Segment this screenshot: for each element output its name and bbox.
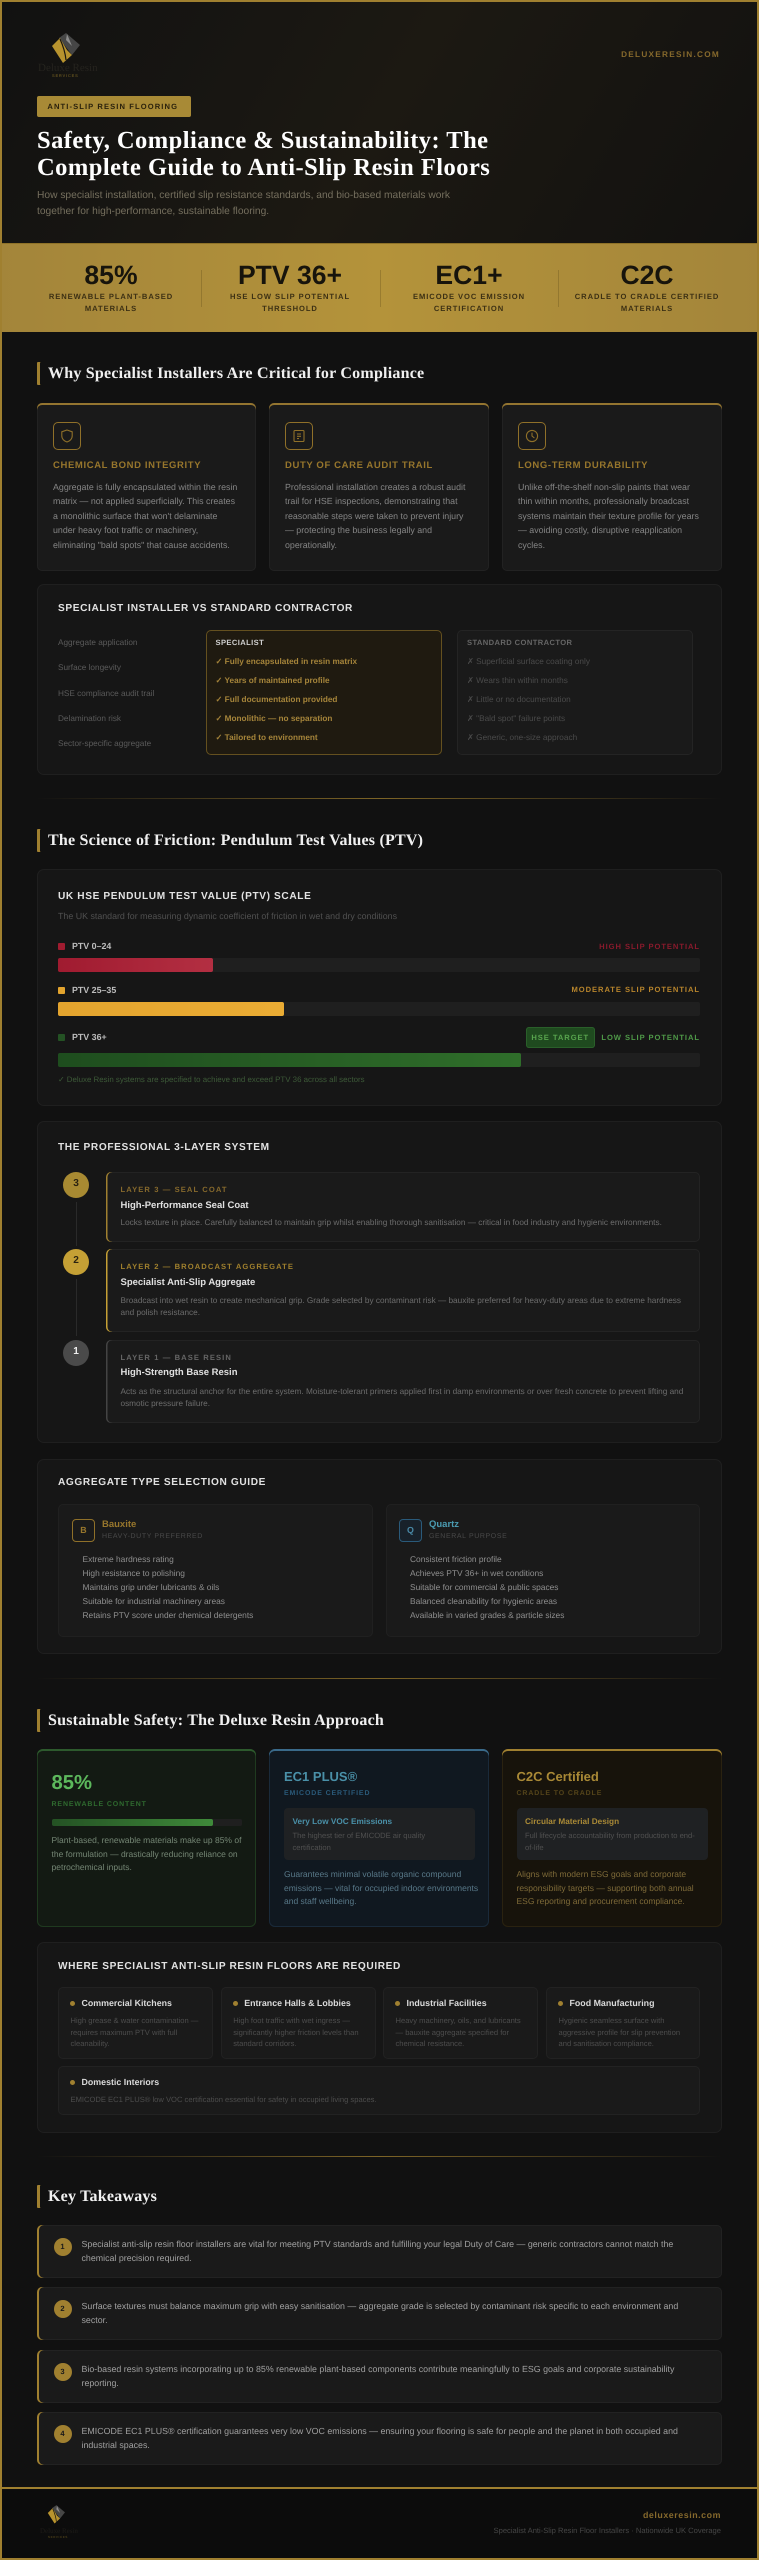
card: C2C certified: C2C Certified — [516, 1769, 599, 1784]
step marker 3 — [63, 1172, 89, 1198]
footer logo — [40, 2505, 78, 2539]
comparison row labels: HSE compliance audit trail — [58, 688, 154, 698]
sector: domestic interiors — [58, 2066, 700, 2115]
heading: key takeaways — [37, 2185, 722, 2208]
footer tagline: Specialist Anti-Slip Resin Floor Installers · Nationwide UK Coverage — [494, 2526, 721, 2535]
sector: food manufacturing — [546, 1987, 700, 2059]
badge text: ANTI-SLIP RESIN FLOORING — [47, 102, 178, 110]
subtitle: together for high-performance, sustainable flooring. — [37, 206, 269, 217]
stat: 85% — [49, 260, 173, 313]
card: EC1 plus: EMICODE CERTIFIED — [284, 1790, 370, 1797]
card: EC1 plus: emissions — vital for occupied indoor environments — [284, 1883, 478, 1893]
card: duty of care audit trail: — protecting the business legally and — [285, 525, 432, 535]
callout: very low VOC: Very Low VOC Emissions — [292, 1817, 392, 1826]
step marker 3: 3 — [73, 1178, 79, 1189]
card: duty of care audit trail: operationally. — [285, 540, 337, 550]
logo tagline: SERVICES — [52, 73, 79, 78]
column: standard contractor: ✗ Generic, one-size approach — [467, 733, 577, 742]
layer 3 card: High-Performance Seal Coat — [120, 1200, 249, 1211]
layer 3 card — [106, 1172, 700, 1242]
HSE target pill: HSE TARGET — [531, 1033, 589, 1042]
sector: entrance halls: High foot traffic with wet ingress — — [233, 2016, 350, 2025]
sector: entrance halls: Entrance Halls & Lobbies — [244, 1998, 351, 2008]
sector: food manufacturing: aggressive profile for slip prevention — [558, 2028, 680, 2037]
sector: commercial kitchens: Commercial Kitchens — [82, 1998, 172, 2008]
column: specialist — [206, 630, 442, 755]
card: EC1 plus — [269, 1749, 489, 1927]
takeaway 2: sector. — [82, 2315, 108, 2325]
stat: C2C — [575, 260, 719, 313]
stat: C2C: MATERIALS — [621, 304, 673, 313]
card: chemical bond integrity: eliminating "bald spots" that cause accidents. — [53, 540, 230, 550]
sector: entrance halls: standard corridors. — [233, 2039, 296, 2048]
stat: 85%: RENEWABLE PLANT-BASED — [49, 292, 173, 301]
takeaway 3: reporting. — [82, 2378, 119, 2388]
sector: industrial facilities: chemical resistance. — [396, 2039, 464, 2048]
takeaway 3: 3 — [60, 2367, 65, 2376]
footer logo tagline: SERVICES — [48, 2535, 68, 2539]
comparison row labels: Surface longevity — [58, 663, 121, 672]
card: EC1 plus: EC1 PLUS® — [284, 1769, 357, 1784]
card: C2C certified: Aligns with modern ESG goals and corporate — [516, 1869, 686, 1879]
panel: specialist vs standard comparison — [37, 584, 722, 775]
stat: PTV 36+: PTV 36+ — [238, 260, 342, 290]
heading: science of friction: The Science of Friction: Pendulum Test Values (PTV) — [48, 832, 423, 849]
icon: logo diamond — [52, 33, 80, 63]
panel: 3-layer system: THE PROFESSIONAL 3-LAYER SYSTEM — [58, 1142, 270, 1153]
stat: EC1+: EC1+ — [435, 260, 503, 290]
takeaway 4 — [37, 2412, 722, 2465]
column: specialist: ✓ Years of maintained profile — [216, 676, 330, 685]
panel: aggregate selection guide — [37, 1459, 722, 1654]
card: quartz: GENERAL PURPOSE — [429, 1533, 507, 1540]
subtitle: How specialist installation, certified slip resistance standards, and bio-based materials work — [37, 190, 450, 201]
stat: PTV 36+ — [230, 260, 350, 313]
card: C2C certified: responsibility targets — supporting both annual — [516, 1883, 694, 1893]
sector: industrial facilities: Heavy machinery, oils, and lubricants — [396, 2016, 521, 2025]
card: long-term durability: — avoiding costly, disruptive reapplication — [518, 525, 682, 535]
stat: C2C: CRADLE TO CRADLE CERTIFIED — [575, 292, 719, 301]
sector: industrial facilities — [383, 1987, 538, 2059]
card: bauxite: Suitable for industrial machinery areas — [82, 1596, 225, 1606]
card: renewable content: RENEWABLE CONTENT — [52, 1801, 147, 1808]
stat: PTV 36+: THRESHOLD — [262, 304, 318, 313]
sector: food manufacturing: Hygienic seamless surface with — [558, 2016, 664, 2025]
column: standard contractor: ✗ "Bald spot" failure points — [467, 714, 565, 723]
card: chemical bond integrity: Aggregate is fully encapsulated within the resin — [53, 482, 237, 492]
HSE target pill — [526, 1027, 594, 1048]
card: quartz: Balanced cleanability for hygienic areas — [410, 1596, 557, 1606]
stat: C2C: C2C — [620, 260, 674, 290]
layer 2 card: Specialist Anti-Slip Aggregate — [120, 1277, 255, 1288]
comparison row labels: Aggregate application — [58, 638, 138, 647]
website url: DELUXERESIN.COM — [621, 50, 720, 59]
sector: food manufacturing: and sanitisation compliance. — [558, 2039, 654, 2048]
panel: aggregate selection guide: AGGREGATE TYPE SELECTION GUIDE — [58, 1477, 266, 1488]
icon: B: B — [80, 1525, 87, 1535]
title: Complete Guide to Anti-Slip Resin Floors — [37, 154, 490, 180]
callout: very low VOC: The highest tier of EMICODE air quality — [292, 1831, 425, 1840]
layer 1 card: High-Strength Base Resin — [120, 1367, 238, 1378]
logo — [38, 33, 98, 78]
logo wordmark: Deluxe Resin — [38, 62, 98, 74]
stats bar — [0, 243, 759, 332]
icon: footer logo diamond — [48, 2505, 65, 2524]
layer 1 card: LAYER 1 — BASE RESIN — [120, 1353, 232, 1362]
heading: sustainable safety — [37, 1709, 722, 1732]
bar chart row: PTV 0-24: HIGH SLIP POTENTIAL — [599, 942, 700, 951]
column: standard contractor: ✗ Superficial surface coating only — [467, 657, 590, 666]
layer 3 card: Locks texture in place. Carefully balanced to maintain grip whilst enabling thorough sanitisation — critical in food industry and hygienic environments. — [120, 1218, 662, 1227]
card: bauxite: Retains PTV score under chemical detergents — [82, 1610, 253, 1620]
takeaway 2 — [37, 2287, 722, 2340]
column: specialist: ✓ Tailored to environment — [216, 733, 318, 742]
takeaway 2: Surface textures must balance maximum grip with easy sanitisation — aggregate grade is selected by contaminant risk specific to each environment and — [82, 2301, 678, 2311]
layer 2 card: and polish resistance. — [120, 1308, 200, 1317]
takeaway 1: Specialist anti-slip resin floor installers are vital for meeting PTV standards and fulfilling your legal Duty of Care — generic contractors cannot match the — [82, 2239, 673, 2249]
card: C2C certified — [502, 1749, 722, 1927]
stat: EC1+: CERTIFICATION — [434, 304, 504, 313]
card: chemical bond integrity: matrix — not applied superficially. This creates — [53, 496, 235, 506]
column: standard contractor: ✗ Little or no documentation — [467, 695, 571, 704]
footer logo wordmark: Deluxe Resin — [40, 2527, 78, 2535]
stat: 85%: MATERIALS — [85, 304, 137, 313]
callout: very low VOC — [284, 1808, 475, 1860]
icon: B — [72, 1519, 95, 1542]
footer — [0, 2487, 759, 2560]
card: renewable content: petrochemical inputs. — [52, 1862, 132, 1872]
callout: circular material design: Circular Material Design — [525, 1817, 619, 1826]
comparison row labels: Delamination risk — [58, 714, 121, 723]
card: quartz: Consistent friction profile — [410, 1554, 502, 1564]
card: C2C certified: ESG reporting and procurement compliance. — [516, 1896, 685, 1906]
panel: where floors are required: WHERE SPECIALIST ANTI-SLIP RESIN FLOORS ARE REQUIRED — [58, 1961, 401, 1972]
card: bauxite: Bauxite — [102, 1519, 136, 1530]
sector: domestic interiors: Domestic Interiors — [82, 2077, 159, 2087]
card: chemical bond integrity: CHEMICAL BOND INTEGRITY — [53, 460, 201, 471]
chart subtitle: The UK standard for measuring dynamic coefficient of friction in wet and dry conditions — [58, 911, 397, 921]
heading: why specialist installers: Why Specialist Installers Are Critical for Compliance — [48, 365, 424, 382]
sector: industrial facilities: — bauxite aggregate specified for — [396, 2028, 509, 2037]
layer 1 card: osmotic pressure failure. — [120, 1399, 210, 1408]
card: bauxite: High resistance to polishing — [82, 1568, 185, 1578]
sector: commercial kitchens: cleanability. — [70, 2039, 110, 2048]
card: duty of care audit trail — [269, 403, 489, 571]
card: chemical bond integrity: under heavy foot traffic or machinery, — [53, 525, 198, 535]
stat: 85%: 85% — [84, 260, 138, 290]
step marker 2: 2 — [73, 1255, 79, 1266]
card: bauxite: Maintains grip under lubricants & oils — [82, 1582, 219, 1592]
panel: where floors are required — [37, 1942, 722, 2133]
takeaway 1 — [37, 2225, 722, 2278]
takeaway 1: 1 — [60, 2242, 65, 2251]
layer 2 card: Broadcast into wet resin to create mechanical grip. Grade selected by contaminant risk — bauxite preferred for heavy-duty areas due to extreme hardness — [120, 1296, 681, 1305]
panel: specialist vs standard comparison: SPECIALIST INSTALLER VS STANDARD CONTRACTOR — [58, 603, 353, 614]
card: duty of care audit trail: reasonable steps were taken to prevent injury — [285, 511, 463, 521]
column: specialist: SPECIALIST — [216, 638, 264, 647]
bar chart row: PTV 25-35: PTV 25–35 — [72, 985, 116, 995]
comparison row labels — [58, 638, 154, 748]
card: long-term durability: Unlike off-the-shelf non-slip paints that wear — [518, 482, 690, 492]
icon: shield — [53, 422, 81, 450]
card: bauxite — [58, 1504, 373, 1637]
card: bauxite: Extreme hardness rating — [82, 1554, 174, 1564]
stat: EC1+ — [413, 260, 525, 313]
card: quartz — [386, 1504, 700, 1637]
card: renewable content: the formulation — drastically reducing reliance on — [52, 1849, 238, 1859]
sector: industrial facilities: Industrial Facilities — [406, 1998, 487, 2008]
column: standard contractor: ✗ Wears thin within months — [467, 676, 568, 685]
card: quartz: Suitable for commercial & public spaces — [410, 1582, 558, 1592]
sector: entrance halls — [221, 1987, 376, 2059]
sector: domestic interiors: EMICODE EC1 PLUS® low VOC certification essential for safety in occupied living spaces. — [70, 2095, 377, 2104]
comparison row labels: Sector-specific aggregate — [58, 739, 151, 748]
card: chemical bond integrity — [37, 403, 256, 571]
step marker 2 — [63, 1249, 89, 1275]
heading: sustainable safety: Sustainable Safety: The Deluxe Resin Approach — [48, 1712, 384, 1729]
card: duty of care audit trail: DUTY OF CARE AUDIT TRAIL — [285, 460, 433, 471]
bar chart row: PTV 36+: LOW SLIP POTENTIAL — [601, 1032, 700, 1042]
header — [0, 0, 759, 243]
column: specialist: ✓ Fully encapsulated in resin matrix — [216, 657, 357, 666]
card: bauxite: HEAVY-DUTY PREFERRED — [102, 1533, 203, 1540]
card: long-term durability: LONG-TERM DURABILITY — [518, 460, 648, 471]
icon: clock — [518, 422, 546, 450]
takeaway 3: Bio-based resin systems incorporating up to 85% renewable plant-based components contribute meaningfully to ESG goals and corporate sustainability — [82, 2364, 674, 2374]
card: EC1 plus: and staff wellbeing. — [284, 1896, 357, 1906]
step marker 1: 1 — [73, 1346, 79, 1357]
takeaway 2: 2 — [60, 2304, 65, 2313]
title: Safety, Compliance & Sustainability: The — [37, 126, 489, 154]
card: quartz: Achieves PTV 36+ in wet conditions — [410, 1568, 543, 1578]
bar chart row: PTV 25-35: MODERATE SLIP POTENTIAL — [571, 985, 700, 994]
badge — [37, 96, 191, 117]
card: renewable content — [37, 1749, 256, 1927]
card: renewable content: Plant-based, renewable materials make up 85% of — [52, 1835, 241, 1845]
progress bar 85% — [52, 1819, 242, 1826]
icon: document — [285, 422, 313, 450]
card: quartz: Quartz — [429, 1519, 459, 1530]
callout: very low VOC: certification — [292, 1843, 331, 1852]
sector: food manufacturing: Food Manufacturing — [570, 1998, 654, 2008]
card: C2C certified: CRADLE TO CRADLE — [516, 1790, 602, 1797]
card: quartz: Available in varied grades & particle sizes — [410, 1610, 564, 1620]
column: specialist: ✓ Full documentation provided — [216, 695, 337, 704]
subtitle — [37, 190, 450, 217]
layer 2 card: LAYER 2 — BROADCAST AGGREGATE — [120, 1262, 294, 1271]
card: EC1 plus: Guarantees minimal volatile organic compound — [284, 1869, 461, 1879]
takeaway 4: 4 — [60, 2429, 65, 2438]
card: long-term durability — [502, 403, 722, 571]
panel: 3-layer system — [37, 1121, 722, 1443]
bar chart row: PTV 25-35 — [58, 985, 700, 1016]
layer 2 card — [106, 1249, 700, 1332]
icon: Q: Q — [407, 1525, 414, 1535]
column: standard contractor: STANDARD CONTRACTOR — [467, 638, 572, 647]
callout: circular material design: of-life — [525, 1843, 544, 1852]
card: duty of care audit trail: Professional installation creates a robust audit — [285, 482, 465, 492]
panel: PTV scale chart — [37, 869, 722, 1106]
bar chart row: PTV 36+: PTV 36+ — [72, 1032, 107, 1042]
sector: commercial kitchens: High grease & water contamination — — [70, 2016, 198, 2025]
stat: EC1+: EMICODE VOC EMISSION — [413, 292, 525, 301]
bar chart row: PTV 0-24: PTV 0–24 — [72, 941, 111, 951]
sector: commercial kitchens — [58, 1987, 213, 2059]
card: long-term durability: cycles. — [518, 540, 545, 550]
takeaway 4: industrial spaces. — [82, 2440, 150, 2450]
icon: Q — [399, 1519, 422, 1542]
heading: why specialist installers — [37, 362, 722, 385]
card: chemical bond integrity: a monolithic surface that won't delaminate — [53, 511, 217, 521]
layer 1 card: Acts as the structural anchor for the entire system. Moisture-tolerant primers applied first in damp environments or over fresh concrete to prevent lifting and — [120, 1387, 683, 1396]
chart note: ✓ Deluxe Resin systems are specified to achieve and exceed PTV 36 across all sectors — [58, 1075, 365, 1084]
layer 3 card: LAYER 3 — SEAL COAT — [120, 1185, 228, 1194]
footer url: deluxeresin.com — [643, 2510, 721, 2520]
takeaway 3 — [37, 2350, 722, 2403]
heading: science of friction — [37, 829, 722, 852]
card: long-term durability: thin within months, professionally broadcast — [518, 496, 689, 506]
column: specialist: ✓ Monolithic — no separation — [216, 714, 332, 723]
card: long-term durability: systems maintain their texture profile for years — [518, 511, 699, 521]
stat: PTV 36+: HSE LOW SLIP POTENTIAL — [230, 292, 350, 301]
panel: PTV scale chart: UK HSE PENDULUM TEST VALUE (PTV) SCALE — [58, 891, 311, 902]
layer 1 card — [106, 1340, 700, 1423]
callout: circular material design — [516, 1808, 708, 1860]
sector: commercial kitchens: requires maximum PTV with full — [70, 2028, 177, 2037]
column: standard contractor — [457, 630, 693, 755]
callout: circular material design: Full lifecycle accountability from production to end- — [525, 1831, 695, 1840]
card: renewable content: 85% — [52, 1772, 92, 1794]
heading: key takeaways: Key Takeaways — [48, 2188, 157, 2205]
takeaway 1: chemical precision required. — [82, 2253, 192, 2263]
title — [37, 126, 490, 180]
bar chart row: PTV 36+ — [58, 1027, 700, 1067]
card: duty of care audit trail: trail for HSE inspections, demonstrating that — [285, 496, 458, 506]
step marker 1 — [63, 1340, 89, 1366]
bar chart row: PTV 0-24 — [58, 941, 700, 972]
takeaway 4: EMICODE EC1 PLUS® certification guarantees very low VOC emissions — ensuring your flooring is safe for people and the planet in both occupied and — [82, 2426, 678, 2436]
sector: entrance halls: significantly higher friction levels than — [233, 2028, 359, 2037]
